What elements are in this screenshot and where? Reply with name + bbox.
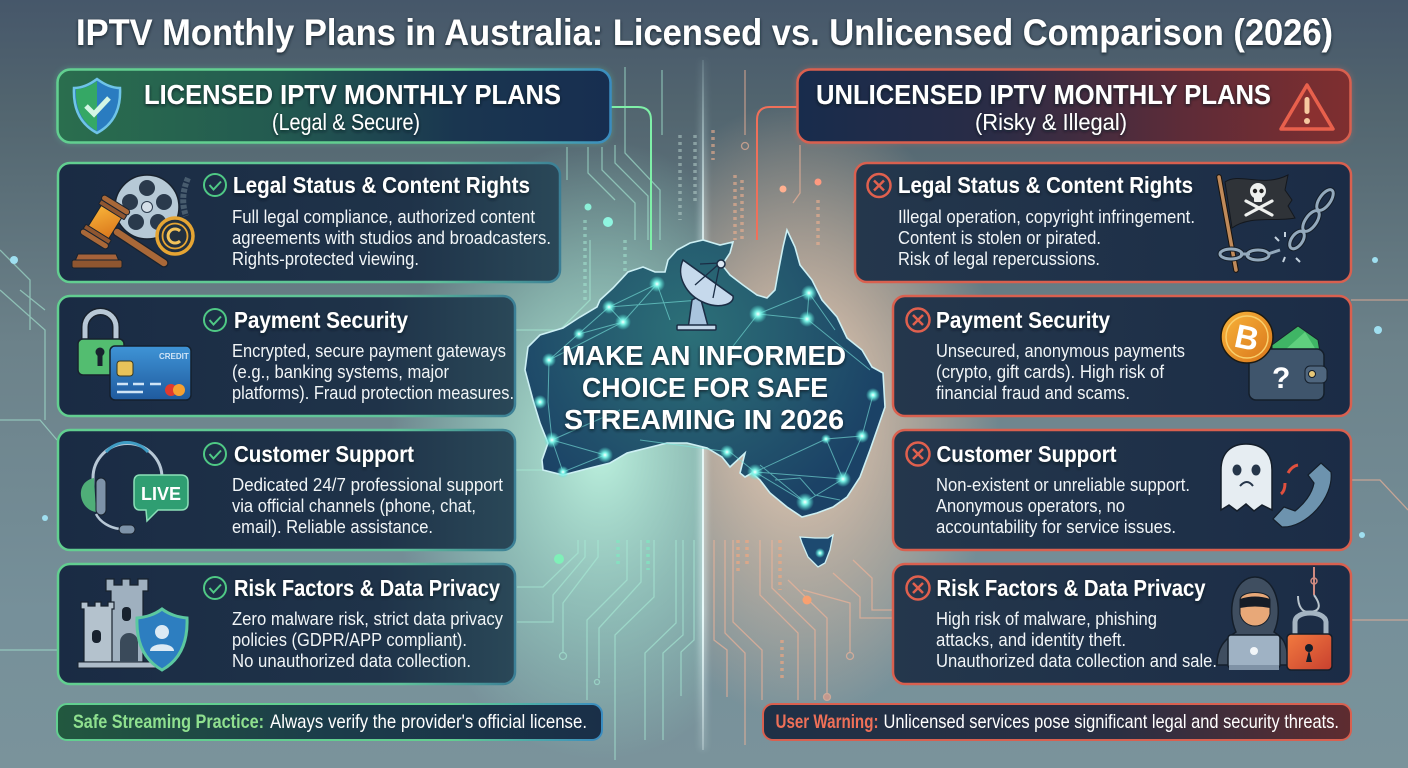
text: No unauthorized data collection. <box>232 650 471 671</box>
tasmania <box>800 535 833 567</box>
status icon <box>204 309 226 331</box>
heading: (Legal & Secure) <box>272 109 420 135</box>
text: Dedicated 24/7 professional support <box>232 474 503 495</box>
text: policies (GDPR/APP compliant). <box>232 629 467 650</box>
heading <box>816 79 1271 135</box>
panel: licensed risk factors <box>58 564 515 684</box>
connector: licensed header to map <box>611 107 651 250</box>
text: Customer Support <box>936 441 1117 467</box>
text: (e.g., banking systems, major <box>232 361 449 382</box>
icon: padlock and credit card <box>78 312 191 400</box>
heading: UNLICENSED IPTV MONTHLY PLANS <box>816 79 1271 110</box>
icon: satellite dish <box>677 260 733 330</box>
text <box>232 575 504 671</box>
panel: unlicensed risk factors <box>893 564 1351 684</box>
text: Risk of legal repercussions. <box>898 248 1100 269</box>
text: Legal Status & Content Rights <box>233 172 530 198</box>
text: Zero malware risk, strict data privacy <box>232 608 504 629</box>
text: accountability for service issues. <box>936 516 1176 537</box>
text <box>232 172 551 269</box>
text <box>232 307 514 403</box>
callout: safe streaming practice: Safe Streaming Practice: <box>73 711 264 733</box>
icon: castle and shield <box>78 579 187 670</box>
status icon <box>204 443 226 465</box>
text <box>936 441 1190 537</box>
mainland <box>525 230 885 517</box>
callout: user warning: User Warning: <box>776 711 878 733</box>
panel: unlicensed header <box>797 69 1351 143</box>
icon: headset and live chat <box>81 443 188 534</box>
text: agreements with studios and broadcasters. <box>232 227 551 248</box>
text: Risk Factors & Data Privacy <box>936 575 1206 601</box>
icon: hacker and broken padlock <box>1217 567 1332 670</box>
status icon <box>906 308 930 332</box>
center message: MAKE AN INFORMED <box>562 340 846 371</box>
text: Content is stolen or pirated. <box>898 227 1101 248</box>
text: Payment Security <box>936 307 1110 333</box>
text: (crypto, gift cards). High risk of <box>936 361 1165 382</box>
callout: safe streaming practice <box>57 704 602 740</box>
status icon <box>868 174 890 197</box>
text: email). Reliable assistance. <box>232 516 433 537</box>
text: Rights-protected viewing. <box>232 248 419 269</box>
text <box>936 575 1217 671</box>
text: Legal Status & Content Rights <box>898 172 1193 198</box>
text: Non-existent or unreliable support. <box>936 474 1190 495</box>
center message: STREAMING IN 2026 <box>564 404 844 435</box>
panel: licensed header <box>57 69 611 143</box>
text <box>898 172 1195 269</box>
heading <box>144 79 561 135</box>
icon: gavel, film reel, copyright <box>72 175 193 268</box>
panel: licensed legal status <box>58 163 560 282</box>
text: Anonymous operators, no <box>936 495 1125 516</box>
text: via official channels (phone, chat, <box>232 495 476 516</box>
heading: LICENSED IPTV MONTHLY PLANS <box>144 79 561 110</box>
icon: shield check <box>74 79 120 133</box>
network nodes <box>533 276 880 558</box>
icon: padlock and credit card: CREDIT <box>159 352 189 361</box>
icon: ghost and broken phone <box>1221 444 1331 527</box>
network lines <box>548 284 873 502</box>
text: Illegal operation, copyright infringement. <box>898 206 1195 227</box>
panel: licensed payment security <box>58 296 515 416</box>
icon: pirate flag and broken chain <box>1219 175 1336 270</box>
icon: headset and live chat: LIVE <box>141 484 181 504</box>
title: IPTV Monthly Plans in Australia: Licensed vs. Unlicensed Comparison (2026) <box>76 12 1333 53</box>
panel: licensed customer support <box>58 430 515 550</box>
text: attacks, and identity theft. <box>936 629 1126 650</box>
icon: bitcoin and wallet: ? <box>1272 362 1290 395</box>
text: platforms). Fraud protection measures. <box>232 382 514 403</box>
text: High risk of malware, phishing <box>936 608 1157 629</box>
status icon <box>204 174 226 196</box>
status icon <box>906 442 930 466</box>
map of Australia <box>525 230 885 567</box>
text: Unauthorized data collection and sale. <box>936 650 1217 671</box>
text: Customer Support <box>234 441 414 467</box>
text: Encrypted, secure payment gateways <box>232 340 506 361</box>
text: Payment Security <box>234 307 408 333</box>
icon: warning triangle <box>1281 85 1333 129</box>
panel: unlicensed payment security <box>893 296 1351 416</box>
status icon <box>204 577 226 599</box>
text: Unsecured, anonymous payments <box>936 340 1185 361</box>
text: Full legal compliance, authorized content <box>232 206 535 227</box>
text <box>232 441 503 537</box>
text: Risk Factors & Data Privacy <box>234 575 500 601</box>
center message <box>562 340 846 435</box>
icon: bitcoin and wallet <box>1221 311 1327 400</box>
status icon <box>906 576 930 600</box>
callout: user warning <box>763 704 1351 740</box>
center message: CHOICE FOR SAFE <box>582 372 828 403</box>
connector: unlicensed header to map <box>757 107 797 240</box>
icon: bitcoin and wallet: B <box>1231 317 1262 358</box>
heading: (Risky & Illegal) <box>975 109 1127 135</box>
callout: safe streaming practice: Always verify the provider's official license. <box>270 711 587 733</box>
text: financial fraud and scams. <box>936 382 1130 403</box>
text <box>936 307 1185 403</box>
panel: unlicensed customer support <box>893 430 1351 550</box>
panel: unlicensed legal status <box>855 163 1351 282</box>
